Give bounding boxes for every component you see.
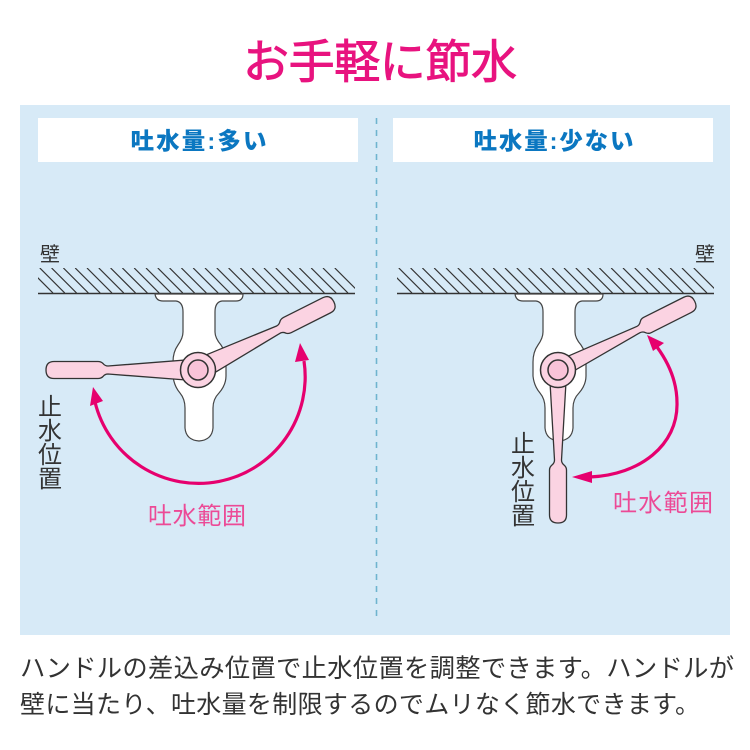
flow range label: 吐水範囲	[148, 503, 246, 530]
description text: 壁に当たり、吐水量を制限するのでムリなく節水できます。	[20, 691, 700, 719]
handle	[540, 294, 699, 523]
description text	[20, 655, 734, 719]
heading: high flow: 吐水量:多い	[130, 128, 266, 154]
panel: low flow	[387, 118, 719, 530]
description text: ハンドルの差込み位置で止水位置を調整できます。ハンドルが	[20, 655, 734, 683]
wall label: 壁	[40, 243, 60, 266]
wall hatching	[28, 268, 360, 294]
faucet body	[155, 294, 243, 441]
flow range arrow	[90, 343, 309, 483]
stop position label: 止水位置	[511, 431, 535, 530]
wall hatching	[387, 268, 719, 294]
faucet body	[515, 294, 603, 441]
heading: low flow: 吐水量:少ない	[474, 128, 634, 154]
panel divider	[376, 118, 378, 622]
stop position label: 止水位置	[38, 394, 62, 493]
flow range label: 吐水範囲	[613, 490, 713, 517]
panel: background	[20, 105, 730, 635]
heading: low flow	[393, 118, 713, 162]
wall label: 壁	[695, 243, 715, 266]
flow range arrow	[572, 335, 677, 483]
title: お手軽に節水	[243, 36, 517, 88]
panel: high flow	[28, 118, 360, 530]
handle	[46, 293, 338, 388]
heading: high flow	[38, 118, 358, 162]
